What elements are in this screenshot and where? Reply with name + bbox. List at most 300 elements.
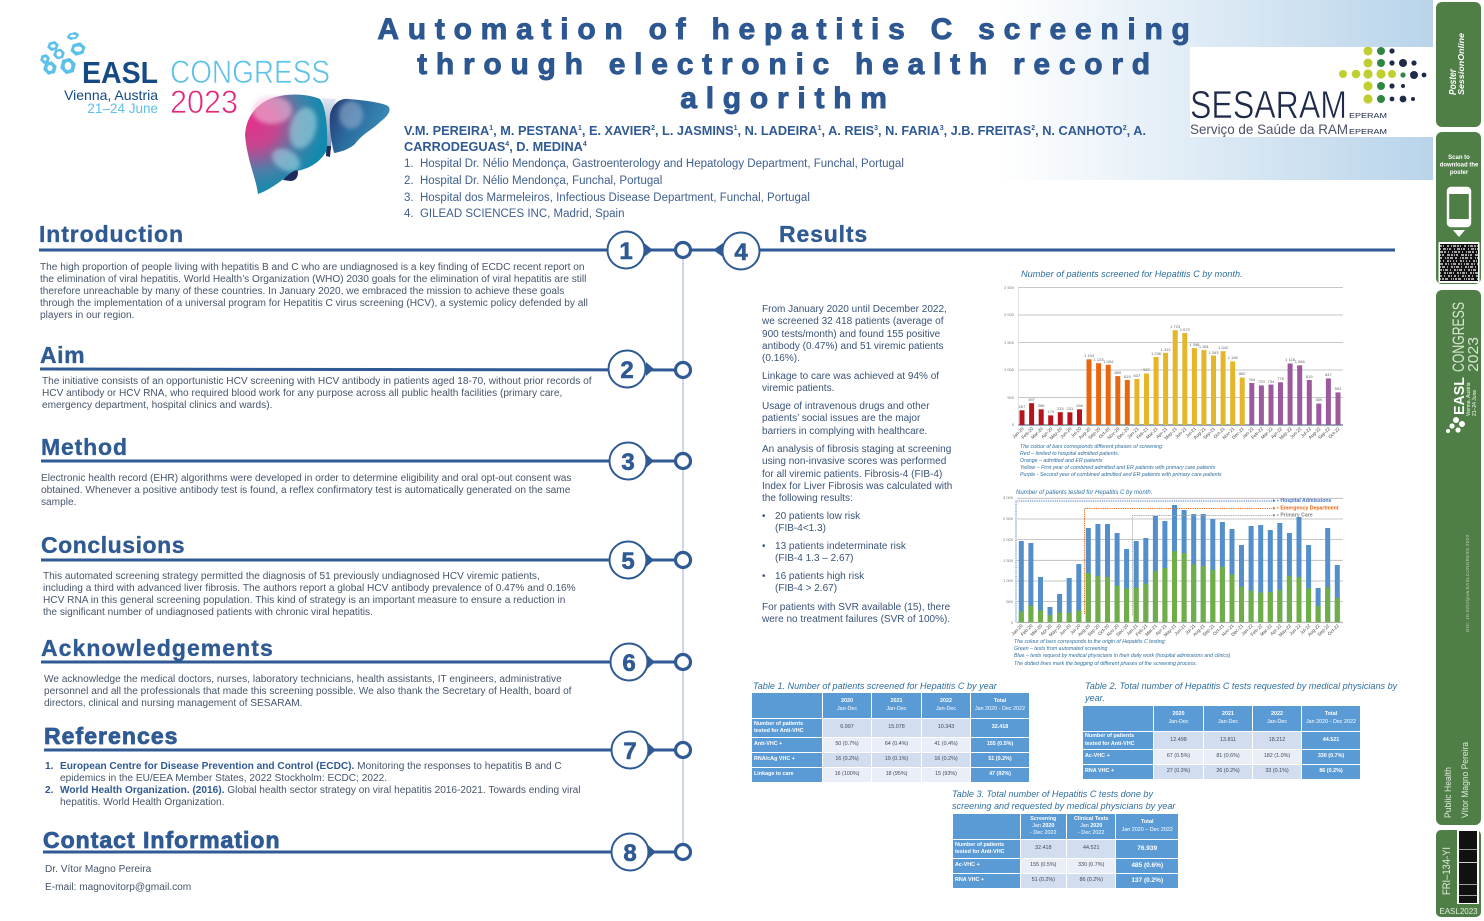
stacked bar chart: patients tested by month: 2 000	[1003, 537, 1014, 542]
logo: SESARAM: SESARAM	[1190, 84, 1347, 127]
table 1: Jan-Dec	[886, 706, 907, 712]
panel: congress and presenter: 21–24 June	[1472, 390, 1478, 416]
chart note: bar colour phases: Purple - Second year of combined admitted and ER patients with primary care patients	[1020, 472, 1222, 478]
table 1: RNA/cAg VHC +	[754, 756, 795, 762]
table 2: RNA VHC +	[1085, 768, 1114, 774]
chart axis: months for tested patients: Sep-20	[1087, 623, 1101, 637]
table 2: 26 (0.2%)	[1216, 768, 1240, 774]
text: acknowledgements: directors, clinical and nursing management of SESARAM.	[44, 698, 302, 709]
text: results summary: 13 patients indeterminate risk	[775, 541, 906, 552]
chart axis: months for screened patients: Feb-22	[1250, 426, 1264, 440]
table 2: Jan-Dec	[1267, 718, 1287, 724]
table 1: 51 (0.2%)	[988, 756, 1012, 762]
text: results summary: viremic patients.	[762, 383, 834, 394]
table 2: Jan-Dec	[1218, 718, 1238, 724]
text: introduction	[40, 262, 588, 321]
text: method: obtained. Whenever a positive antibody test is found, a reflex confirmatory test is automatically generated on the same	[41, 485, 570, 496]
chart note: test origin: Green – tests from automated screening	[1014, 646, 1107, 652]
illustration: liver	[245, 94, 390, 194]
chart axis: months for screened patients: Mar-20	[1030, 426, 1044, 440]
text: results summary: For patients with SVR available (15), there	[762, 602, 950, 613]
chart axis: months for screened patients: Sep-22	[1317, 426, 1331, 440]
chart axis: months for screened patients: Aug-21	[1193, 426, 1207, 440]
text: results summary	[762, 304, 952, 625]
chart axis: months for tested patients: May-21	[1163, 623, 1178, 638]
text: references: European Centre for Disease Prevention and Control (ECDC). Monitoring the responses to hepatitis B and C	[60, 761, 562, 772]
timeline: section lines and numbered nodes: 1	[619, 238, 633, 265]
text: results summary: we screened 32 418 patients (average of	[762, 316, 944, 327]
caption: table 3	[952, 789, 1176, 811]
panel: congress and presenter: 2023	[1465, 337, 1482, 372]
chart note: bar colour phases: Orange – admitted and ER patients	[1020, 458, 1103, 464]
bar chart: patients screened by month: 231	[1067, 406, 1074, 411]
chart note: bar colour phases: Red – limited to hospital admitted patients.	[1020, 451, 1119, 457]
table 1: Linkage to care	[754, 771, 794, 777]
table 1: 15 (93%)	[935, 771, 957, 777]
text: results summary: Usage of intravenous drugs and other	[762, 401, 930, 412]
chart axis: months for screened patients	[1011, 426, 1341, 441]
chart axis: months for screened patients: Sep-21	[1202, 426, 1217, 440]
stacked bar chart: patients tested by month: ▸ ▪ Emergency Department	[1272, 506, 1339, 512]
chart axis: months for screened patients: Mar-22	[1260, 426, 1274, 440]
text: references: World Health Organization. (2016). Global health sector strategy on viral hepatitis 2016-2021. Towards ending viral	[60, 785, 580, 796]
text: results summary: 16 patients high risk	[775, 571, 864, 582]
chart axis: months for tested patients: Feb-22	[1250, 623, 1264, 637]
bar chart: patients screened by month: 286	[1038, 403, 1045, 408]
panel: abstract number and barcode: FRI–134-YI	[1441, 847, 1453, 895]
logo: SESARAM: EPERAM	[1349, 127, 1387, 136]
bar chart: patients screened by month: 1 094	[1103, 359, 1114, 364]
bar chart: patients screened by month: 1 342	[1218, 345, 1229, 350]
text: references: hepatitis. World Health Organization.	[60, 797, 224, 808]
stacked bar chart: patients tested by month: 1 500	[1003, 558, 1014, 563]
bar chart: patients screened by month: 174	[1047, 409, 1055, 414]
text: method	[41, 473, 572, 508]
heading: Introduction: Introduction	[39, 221, 184, 247]
heading: Acknowledgements: Acknowledgements	[41, 635, 274, 661]
chart axis: months for tested patients: Sep-21	[1201, 623, 1216, 637]
chart axis: months for screened patients: Nov-20	[1106, 426, 1121, 440]
bar chart: patients screened by month: 1 156	[1228, 355, 1238, 360]
heading: Method: Method	[41, 434, 128, 460]
text: results summary: antibody (0.47%) and 51 viremic patients	[762, 341, 944, 352]
chart title: patients screened by month: Number of patients screened for Hepatitis C by month.	[1021, 269, 1243, 279]
timeline: section lines and numbered nodes: 3	[621, 449, 635, 476]
affiliations	[404, 158, 904, 220]
panel: abstract number and barcode	[1436, 830, 1481, 917]
text: aim: emergency department, hospital clinics and wards).	[42, 400, 272, 411]
panel: Poster Session Online: SessionOnline	[1456, 33, 1466, 95]
table 1: 64 (0.4%)	[885, 741, 908, 747]
text: method: Electronic health record (EHR) algorithms were developed in order to determine eligibility and oral opt-out consent was	[41, 473, 571, 484]
text: results summary: Index for Liver Fibrosis was calculated with	[762, 481, 952, 492]
text: results summary: patients’ social issues are the major	[762, 413, 920, 424]
timeline: section lines and numbered nodes: 6	[622, 650, 636, 677]
chart axis: months for screened patients: Sep-20	[1087, 426, 1102, 440]
table 1: Jan-Dec	[837, 706, 857, 712]
panel: congress and presenter: Vítor Magno Pereira	[1460, 741, 1471, 818]
table 1: 10.343	[938, 724, 954, 730]
table 3: 32.418	[1035, 845, 1052, 851]
bar chart: patients screened by month: 500	[1007, 395, 1015, 400]
table 1: 2021	[890, 698, 902, 704]
text: results summary: (FIB-4 > 2.67)	[775, 583, 837, 594]
chart axis: months for screened patients: Jun-21	[1174, 426, 1188, 440]
bar chart: patients screened by month: 764	[1248, 377, 1256, 382]
text: introduction: The high proportion of people living with hepatitis B and C who are undiagnosed is a key finding of ECDC recent report on	[40, 262, 585, 273]
bar chart: patients screened by month: 1 000	[1004, 367, 1015, 372]
text: acknowledgements: personnel and all the professionals that made this screening possible. We also thank the Secretary of Health, board of	[44, 686, 572, 697]
table 3: 44.521	[1083, 845, 1099, 851]
chart axis: months for tested patients: Aug-22	[1307, 623, 1321, 637]
stacked bar chart: patients tested by month: 3 000	[1003, 495, 1014, 500]
panel: abstract number and barcode: EASL2023	[1439, 907, 1478, 916]
chart axis: months for screened patients: Oct-20	[1098, 426, 1111, 439]
chart axis: months for tested patients: Dec-21	[1230, 623, 1245, 637]
chart axis: months for tested patients: Mar-20	[1029, 623, 1044, 637]
heading: Results: Results	[779, 221, 868, 247]
logo: SESARAM	[1190, 47, 1433, 137]
authors: CARRODEGUAS4, D. MEDINA4	[404, 139, 587, 154]
table 2: tested for Anti-VHC	[1085, 740, 1135, 746]
chart axis: months for screened patients: Oct-22	[1327, 426, 1341, 439]
table 3: Clinical Tests	[1074, 816, 1108, 822]
bar chart: patients screened by month: 847	[1325, 372, 1333, 377]
chart note: bar colour phases: The colour of bars corresponds different phases of screening:	[1020, 444, 1163, 450]
table 2: 2022	[1271, 711, 1283, 717]
text: references	[45, 761, 580, 808]
chart axis: months for tested patients: Dec-20	[1115, 623, 1130, 637]
bar chart: patients screened by month: 2 500	[1004, 285, 1015, 290]
table 3: Total	[1141, 819, 1153, 825]
caption: table 2	[1084, 681, 1398, 703]
text: conclusions: including a third with advanced liver fibrosis. The authors report a global HCV antibody prevalence of 0.47% and 0.16%	[43, 583, 576, 594]
chart axis: months for screened patients: May-20	[1049, 426, 1063, 441]
bar chart: patients screened by month: 389	[1315, 397, 1323, 402]
chart axis: months for tested patients: Apr-22	[1269, 623, 1283, 636]
timeline: section lines and numbered nodes: 4	[734, 239, 748, 266]
logo: EASL Congress 2023: Vienna, Austria	[64, 87, 158, 103]
text: results summary: •	[762, 511, 766, 522]
affiliations: 1. Hospital Dr. Nélio Mendonça, Gastroenterology and Hepatology Department, Funchal, Portugal	[404, 158, 904, 170]
table 3: 485 (0.6%)	[1131, 862, 1163, 869]
chart axis: months for tested patients: Oct-22	[1327, 623, 1340, 636]
title	[377, 13, 1199, 115]
affiliations: 3. Hospital dos Marmeleiros, Infectious Disease Department, Funchal, Portugal	[404, 192, 810, 204]
table 1: tested for Anti-VHC	[754, 728, 804, 734]
affiliations: 2. Hospital Dr. Nélio Mendonça, Funchal, Portugal	[404, 175, 662, 187]
chart note: test origin: The dotted lines mark the begging of different phases of the screening process.	[1014, 661, 1197, 667]
caption: table 2: Table 2. Total number of Hepatitis C tests requested by medical physicians by	[1085, 681, 1397, 691]
table 1: 32.418	[992, 724, 1008, 730]
table 2: 44.521	[1323, 737, 1339, 743]
table 1: 50 (0.7%)	[835, 741, 859, 747]
table 1: Jan 2020 - Dec 2022	[975, 706, 1025, 712]
stacked bar chart: patients tested by month: 500	[1006, 599, 1014, 604]
chart axis: months for screened patients: Jul-20	[1070, 426, 1083, 439]
stacked bar chart: patients tested by month: 1 000	[1003, 578, 1014, 583]
stacked bar chart: patients tested by month: 0	[1011, 620, 1014, 625]
table 3: 76.939	[1137, 845, 1157, 852]
bar chart: patients screened by month: 2 000	[1004, 312, 1015, 317]
bar chart: patients screened by month: 720	[1258, 379, 1266, 384]
panel: congress and presenter: Public Health	[1443, 767, 1454, 818]
chart axis: months for screened patients: Jan-21	[1126, 426, 1140, 440]
text: introduction: the elimination of viral hepatitis. World Health’s Organization (WHO) 2030 goals for the elimination of viral hepatitis are still	[40, 274, 586, 285]
timeline: section lines and numbered nodes: 5	[621, 548, 635, 575]
chart axis: months for tested patients: Jul-21	[1184, 623, 1197, 636]
table 2: Number of patients	[1085, 733, 1134, 739]
chart axis: months for screened patients: Apr-21	[1155, 426, 1169, 439]
text: results summary: (0.16%).	[762, 353, 800, 364]
chart axis: months for screened patients: Apr-20	[1040, 426, 1054, 439]
bar chart: patients screened by month: 1 723	[1170, 324, 1181, 329]
table 3: RNA VHC +	[955, 877, 984, 883]
bar chart: patients screened by month: 1 086	[1295, 359, 1305, 364]
bar chart: patients screened by month: 937	[1143, 367, 1151, 372]
chart axis: months for screened patients: Feb-21	[1135, 426, 1150, 440]
bar chart: patients screened by month: 1 118	[1285, 357, 1296, 362]
bar chart: patients screened by month: 1 194	[1084, 353, 1095, 358]
table 1: 19 (0.1%)	[885, 756, 908, 762]
table 1: 41 (0.4%)	[934, 741, 958, 747]
table 1: 6.997	[840, 724, 854, 730]
chart note: bar colour phases	[1020, 444, 1222, 478]
bar chart: patients screened by month: 592	[1335, 386, 1342, 391]
text: results summary: were no treatment failures (SVR of 100%).	[762, 614, 950, 625]
text: conclusions: the significant number of undiagnosed patients with chronic viral hepatitis.	[43, 607, 373, 618]
table 2: 12.498	[1170, 737, 1187, 743]
chart axis: months for tested patients	[1010, 623, 1340, 638]
bar chart: patients screened by month	[1004, 285, 1343, 427]
chart note: test origin: Blue – tests request by medical physicians in their daily work (hospital admissions and clinics)	[1014, 653, 1230, 659]
chart axis: months for screened patients: Jul-22	[1300, 426, 1312, 439]
table 2: 27 (0.3%)	[1167, 768, 1190, 774]
text: conclusions: This automated screening strategy permitted the diagnosis of 51 previously undiagnosed HCV viremic patients,	[43, 571, 540, 582]
table 2: 67 (0.5%)	[1167, 753, 1190, 759]
chart axis: months for tested patients: May-22	[1278, 623, 1292, 638]
chart note: bar colour phases: Yellow – First year of combined admitted and ER patients with primary care patients	[1020, 465, 1215, 471]
text: introduction: therefore unreachable by many of these countries. In January 2020, we embraced the mission to achieve these goals	[40, 286, 564, 297]
table 3	[953, 814, 1178, 888]
table 1: 47 (92%)	[989, 771, 1011, 777]
panel: Poster Session Online: Poster	[1447, 68, 1459, 95]
affiliations: 4. GILEAD SCIENCES INC, Madrid, Spain	[404, 208, 624, 220]
table 1: Anti-VHC +	[754, 741, 782, 747]
chart axis: months for tested patients: Jul-22	[1299, 623, 1312, 636]
chart axis: months for screened patients: Jul-21	[1185, 426, 1197, 439]
chart axis: months for tested patients: Oct-21	[1212, 623, 1225, 636]
text: aim: HCV antibody or HCV RNA, who required blood work for any purpose across all public health facilities (primary care,	[42, 388, 562, 399]
table 1: Jan-Dec	[936, 706, 956, 712]
table 3: 51 (0.2%)	[1032, 877, 1055, 883]
table 3: Screening	[1030, 816, 1056, 822]
chart axis: months for tested patients: Jul-20	[1069, 623, 1082, 636]
chart axis: months for screened patients: May-21	[1164, 426, 1178, 441]
bar chart: patients screened by month: 0	[1012, 422, 1015, 427]
chart axis: months for screened patients: Dec-20	[1116, 426, 1130, 440]
logo: EASL Congress 2023	[40, 32, 330, 120]
table 2	[1083, 706, 1360, 779]
bar chart: patients screened by month: 1 361	[1199, 344, 1210, 349]
chart axis: months for tested patients: Aug-20	[1077, 623, 1091, 637]
chart note: test origin	[1014, 639, 1230, 667]
text: introduction: players in our region.	[40, 310, 134, 321]
bar chart: patients screened by month: 286	[1076, 403, 1084, 408]
logo: EASL Congress 2023: CONGRESS	[170, 54, 330, 90]
caption: table 3: screening and requested by medical physicians by year	[952, 801, 1175, 811]
text: aim: The initiative consists of an opportunistic HCV screening with HCV antibody in patients aged 18-70, without prior records of	[42, 376, 592, 387]
panel: congress and presenter: DOI: 10.3252/pvw.EASLCONGRESS.2023	[1465, 535, 1470, 632]
table 3: tested for Anti-VHC	[955, 849, 1005, 855]
table 3: Ac-VHC +	[955, 862, 980, 868]
chart axis: months for tested patients: Feb-21	[1135, 623, 1149, 637]
bar chart: patients screened by month: 819	[1306, 374, 1313, 379]
table 2: Ac-VHC +	[1085, 753, 1110, 759]
table 1: 16 (100%)	[835, 771, 859, 777]
logo: EASL Congress 2023: 21–24 June	[87, 101, 158, 116]
text: results summary: (FIB-4 1.3 – 2.67)	[775, 553, 854, 564]
table 2: 86 (0.2%)	[1319, 768, 1343, 774]
panel: scan to download: download the	[1440, 162, 1479, 168]
chart axis: months for screened patients: Jan-20	[1011, 426, 1025, 440]
text: results summary: barriers in complying with healthcare.	[762, 426, 927, 437]
chart axis: months for screened patients: Mar-21	[1145, 426, 1159, 440]
table 3: - Dec 2022	[1030, 830, 1056, 836]
timeline: section lines and numbered nodes: 8	[623, 840, 637, 867]
bar chart: patients screened by month: 837	[1134, 373, 1141, 378]
table 3: Jan 2020	[1032, 823, 1054, 829]
table 3: 330 (0.7%)	[1078, 862, 1104, 868]
text: results summary: for all viremic patients. Fibrosis-4 (FIB-4)	[762, 469, 942, 480]
chart axis: months for tested patients: Jun-20	[1058, 623, 1072, 637]
table 1: 2022	[940, 698, 952, 704]
chart axis: months for tested patients: Apr-20	[1039, 623, 1053, 636]
bar chart: patients screened by month: 1 312	[1161, 347, 1171, 352]
chart axis: months for screened patients: Aug-22	[1307, 426, 1322, 440]
bar chart: patients screened by month: 776	[1277, 376, 1285, 381]
text: introduction: through the implementation of a universal program for Hepatitis C virus screening (HCV), a systemic policy defended by all	[40, 298, 588, 309]
table 1: 15.078	[888, 724, 905, 730]
table 2: 330 (0.7%)	[1318, 753, 1344, 759]
bar chart: patients screened by month: 1 236	[1151, 351, 1162, 356]
bar chart: patients screened by month: 889	[1114, 370, 1122, 375]
text: results summary: 900 tests/month) and found 155 positive	[762, 329, 940, 340]
table 2: Total	[1325, 711, 1337, 717]
panel: congress and presenter: EASL	[1451, 377, 1468, 415]
bar chart: patients screened by month: 1 398	[1189, 342, 1200, 347]
chart axis: months for screened patients: Jan-22	[1241, 426, 1255, 440]
chart axis: months for tested patients: Feb-20	[1020, 623, 1034, 637]
logo: SESARAM: EPERAM	[1349, 111, 1387, 120]
chart axis: months for tested patients: Jun-22	[1288, 623, 1302, 637]
text: results summary: Linkage to care was achieved at 94% of	[762, 371, 939, 382]
chart axis: months for tested patients: Jan-21	[1125, 623, 1139, 637]
logo: EASL Congress 2023: 2023	[170, 84, 238, 120]
text: references: 1.	[45, 761, 53, 772]
table 1: 2020	[841, 698, 853, 704]
chart axis: months for screened patients: Nov-21	[1221, 426, 1236, 440]
text: references: 2.	[45, 785, 53, 796]
chart axis: months for tested patients: May-20	[1048, 623, 1063, 638]
header gradient band	[0, 0, 1433, 180]
text: results summary: An analysis of fibrosis staging at screening	[762, 444, 951, 455]
text: method: sample.	[41, 497, 76, 508]
table 3: 137 (0.2%)	[1131, 877, 1163, 884]
panel: scan to download: poster	[1450, 170, 1469, 176]
chart axis: months for tested patients: Nov-20	[1106, 623, 1120, 637]
text: contact: E-mail: magnovitorp@gmail.com	[45, 882, 191, 893]
table 1: 18 (95%)	[886, 771, 907, 777]
table 1: 16 (0.2%)	[835, 756, 859, 762]
text: results summary: 20 patients low risk	[775, 511, 860, 522]
chart axis: months for screened patients: Jun-20	[1059, 426, 1073, 440]
chart axis: months for tested patients: Aug-21	[1192, 623, 1206, 637]
chart axis: months for tested patients: Oct-20	[1097, 623, 1111, 636]
heading: Contact Information: Contact Information	[43, 827, 280, 853]
bar chart: patients screened by month: 862	[1239, 371, 1246, 376]
text: acknowledgements: We acknowledge the medical doctors, nurses, laboratory technicians, health assistants, IT engineers, administrative	[44, 674, 562, 685]
timeline: section lines and numbered nodes: 2	[620, 357, 634, 384]
chart axis: months for tested patients: Apr-21	[1154, 623, 1168, 636]
table 2: 13.811	[1220, 737, 1236, 743]
title: algorithm	[680, 82, 896, 115]
bar chart: patients screened by month: 819	[1124, 374, 1131, 379]
stacked bar chart: patients tested by month: ▸ ▪ Hospital Admissions	[1272, 498, 1332, 504]
stacked bar chart: patients tested by month: 2 500	[1003, 516, 1014, 521]
table 1: 16 (0.2%)	[934, 756, 958, 762]
table 3: Number of patients	[955, 842, 1004, 848]
chart axis: months for tested patients: Nov-21	[1221, 623, 1235, 637]
chart axis: months for screened patients: Feb-20	[1020, 426, 1035, 440]
bar chart: patients screened by month: 1 500	[1004, 340, 1015, 345]
stacked bar chart: patients tested by month	[1003, 495, 1343, 625]
chart axis: months for tested patients: Jun-21	[1173, 623, 1187, 637]
text: results summary: From January 2020 until December 2022,	[762, 304, 947, 315]
chart axis: months for screened patients: Jun-22	[1289, 426, 1303, 440]
panel: congress and presenter: CONGRESS	[1449, 302, 1468, 372]
table 3: 155 (0.5%)	[1030, 862, 1056, 868]
caption: table 3: Table 3. Total number of Hepatitis C tests done by	[952, 789, 1153, 799]
table 3: Jan 2020	[1080, 823, 1102, 829]
text: results summary: using non-invasive scores was performed	[762, 456, 946, 467]
chart axis: months for tested patients: Mar-22	[1259, 623, 1273, 637]
table 2: 33 (0.1%)	[1265, 768, 1289, 774]
chart axis: months for tested patients: Jan-22	[1240, 623, 1254, 637]
chart axis: months for screened patients: Oct-21	[1213, 426, 1226, 439]
stacked bar chart: patients tested by month: ▸ ▪ Primary Care	[1272, 512, 1313, 518]
heading: Aim: Aim	[40, 342, 85, 368]
table 2: 81 (0.6%)	[1216, 753, 1240, 759]
table 2: 2021	[1222, 711, 1234, 717]
text: conclusions: HCV RNA in this general screening population. This kind of strategy is an important measure to ensure a reduction in	[43, 595, 565, 606]
title: through electronic health record	[417, 48, 1159, 80]
chart axis: months for screened patients: May-22	[1278, 426, 1293, 441]
table 1: 155 (0.5%)	[987, 741, 1013, 747]
authors	[404, 123, 1146, 154]
chart title: patients tested by month: Number of patients tested for Hepatitis C by month.	[1016, 490, 1152, 496]
table 2: 18.212	[1269, 737, 1285, 743]
authors: V.M. PEREIRA1, M. PESTANA1, E. XAVIER2, L. JASMINS1, N. LADEIRA1, A. REIS3, N. FARIA3, J.B. FREITAS2, N. CANHOTO2, A.	[404, 123, 1146, 138]
text: contact	[45, 864, 191, 893]
text: results summary: •	[762, 571, 766, 582]
panel: congress and presenter: Vienna, Austria	[1466, 382, 1472, 416]
text: results summary: (FIB-4<1.3)	[775, 523, 826, 534]
table 2: 2020	[1172, 711, 1184, 717]
text: results summary: •	[762, 541, 766, 552]
chart axis: months for tested patients: Mar-21	[1144, 623, 1158, 637]
title: Automation of hepatitis C screening	[377, 13, 1199, 46]
